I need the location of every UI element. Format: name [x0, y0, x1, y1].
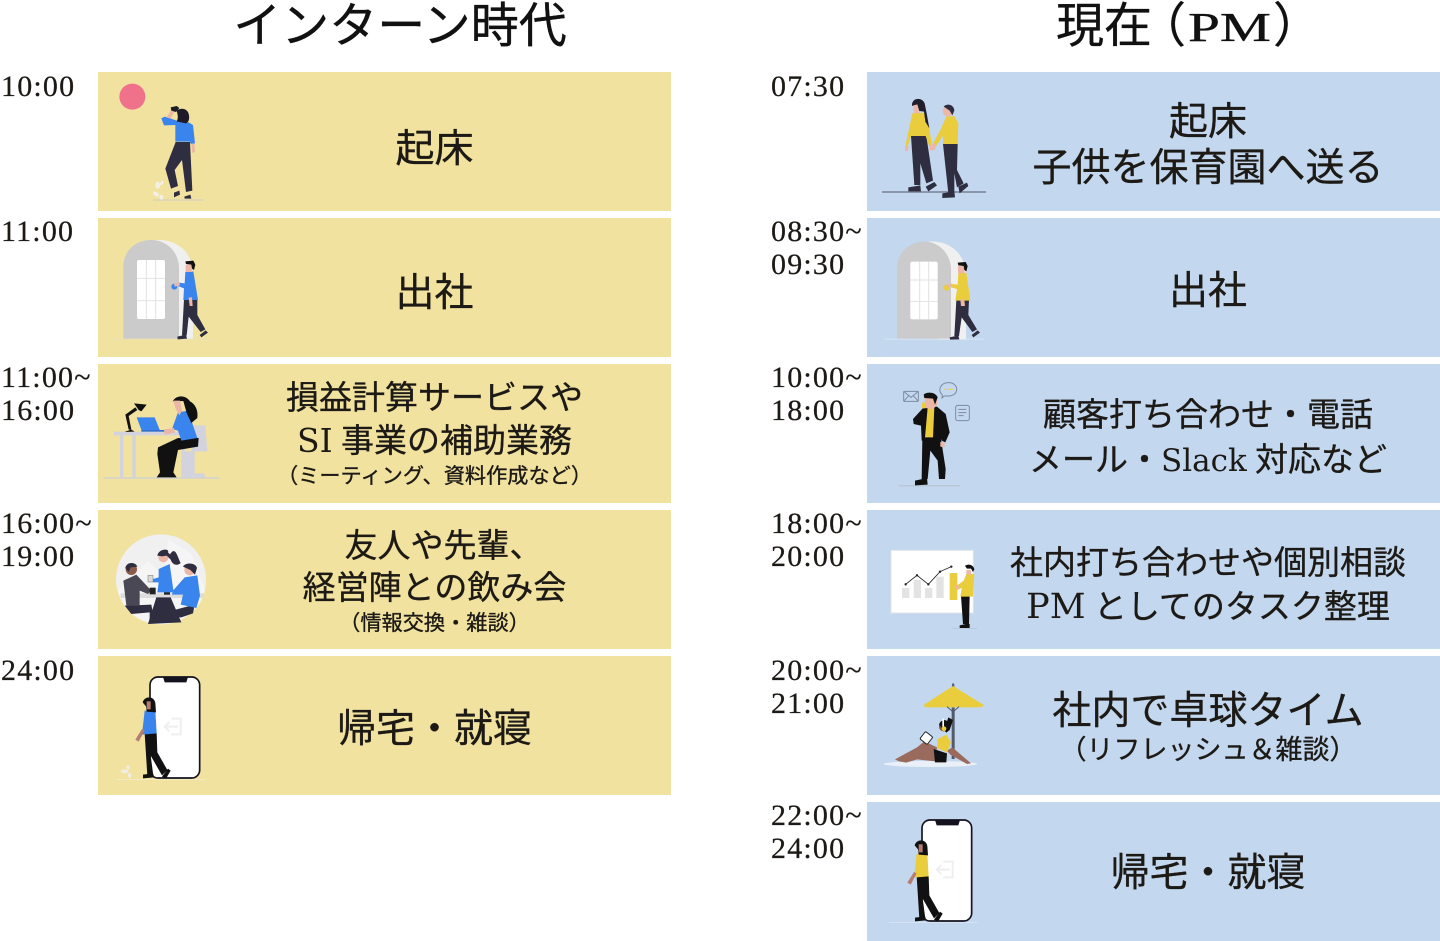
panel: 起床 (intern) — [98, 72, 671, 211]
time: 16:00~19:00: 16:00~ — [1, 507, 93, 540]
time: 22:00~24:00 — [771, 799, 863, 865]
text: 友人や先輩、: 経営陣との飲み会 — [303, 571, 566, 607]
text: 起床 子供を保育園へ送る: 子供を保育園へ送る — [1032, 147, 1384, 190]
time: 08:30~09:30 — [771, 215, 863, 281]
time: 10:00~18:00: 10:00~ — [771, 361, 863, 394]
time: 20:00~21:00 — [771, 654, 863, 720]
time: 10:00~18:00 — [771, 361, 863, 427]
text: 起床: 起床 — [395, 128, 474, 171]
icon: man at door — [884, 242, 984, 340]
panel: 損益計算サービスや SI 事業の補助業務 — [98, 364, 671, 503]
time: 11:00~16:00 — [1, 361, 92, 427]
time: 10:00~18:00: 18:00 — [771, 394, 845, 427]
time: 18:00~20:00 — [771, 507, 863, 573]
text: 損益計算サービスや: （ミーティング、資料作成など） — [277, 464, 592, 488]
panel: 友人や先輩 — [98, 510, 671, 649]
time: 18:00~20:00: 18:00~ — [771, 507, 863, 540]
panel: 帰宅・就寝 (PM) — [867, 802, 1440, 941]
time: 20:00~21:00: 20:00~ — [771, 654, 863, 687]
time: 11:00: 11:00 — [1, 215, 74, 248]
text: 社内打ち合わせや個別相談: PM としてのタスク整理 — [1026, 587, 1390, 627]
text: 帰宅・就寝: 帰宅・就寝 — [1110, 852, 1306, 895]
time: 20:00~21:00: 21:00 — [771, 687, 845, 720]
title: 現在（PM） — [1056, 0, 1321, 53]
icon: woman and phone — [889, 819, 978, 922]
text: 社内で卓球タイム — [1052, 690, 1364, 765]
text: 社内打ち合わせや個別相談: 社内打ち合わせや個別相談 — [1010, 546, 1406, 582]
panel: 起床 子供を保育園へ送る — [867, 72, 1440, 211]
time: 18:00~20:00: 20:00 — [771, 540, 845, 573]
panel: 出社 (PM) — [867, 218, 1440, 357]
icon: woman and sun — [119, 84, 203, 201]
text: 帰宅・就寝: 帰宅・就寝 — [337, 708, 532, 751]
icon: man at door — [112, 240, 212, 340]
icon: man at chart board — [890, 550, 977, 629]
title: 現在（PM）: PM — [1188, 4, 1271, 50]
text: 社内で卓球タイム: （リフレッシュ＆雑談） — [1060, 735, 1356, 765]
time: 11:00~16:00: 16:00 — [1, 394, 75, 427]
time: 07:30: 07:30 — [771, 70, 845, 103]
text: 顧客打ち合わせ・電話: 顧客打ち合わせ・電話 — [1043, 398, 1373, 434]
title: インターン時代: インターン時代 — [233, 0, 567, 53]
time: 22:00~24:00: 22:00~ — [771, 799, 863, 832]
time: 10:00: 10:00 — [1, 70, 75, 103]
text: 損益計算サービスや — [277, 380, 592, 488]
panel: 出社 (intern) — [98, 218, 671, 357]
time: 08:30~09:30: 08:30~ — [771, 215, 863, 248]
text: 損益計算サービスや: SI 事業の補助業務 — [297, 421, 572, 460]
icon: couple holding hands — [882, 98, 986, 198]
text: 友人や先輩、: 友人や先輩、 — [344, 529, 542, 565]
icon: man on phone — [898, 382, 970, 486]
time: 11:00~16:00: 11:00~ — [1, 361, 92, 394]
panel: 社内で卓球タイム — [867, 656, 1440, 795]
text: 出社: 出社 — [1169, 270, 1247, 313]
time: 16:00~19:00 — [1, 507, 93, 573]
panel: 顧客打ち合わせ・電話 — [867, 364, 1440, 503]
text: ） — [1273, 0, 1321, 53]
panel: 帰宅・就寝 (intern) — [98, 656, 671, 795]
time: 16:00~19:00: 19:00 — [1, 540, 75, 573]
time: 08:30~09:30: 09:30 — [771, 248, 845, 281]
text: 損益計算サービスや: 損益計算サービスや — [286, 381, 583, 417]
icon: people around a table — [116, 534, 206, 624]
panel: 社内打ち合わせや個別相談 — [867, 510, 1440, 649]
text: 社内打ち合わせや個別相談 — [1010, 546, 1406, 627]
text: 友人や先輩、: （情報交換・雑談） — [339, 611, 530, 635]
time: 24:00: 24:00 — [1, 654, 75, 687]
text: 起床 子供を保育園へ送る: 起床 — [1169, 101, 1247, 144]
text: 社内で卓球タイム: 社内で卓球タイム — [1052, 690, 1364, 733]
time: 22:00~24:00: 24:00 — [771, 832, 845, 865]
text: 起床 子供を保育園へ送る — [1032, 101, 1384, 190]
text: 友人や先輩、 — [303, 528, 566, 635]
title: 現在（PM）: 現在 — [1056, 0, 1152, 53]
text: 顧客打ち合わせ・電話 — [1029, 398, 1387, 479]
icon: woman and phone — [117, 676, 206, 780]
title: 現在（PM）: （ — [1138, 0, 1186, 53]
text: 顧客打ち合わせ・電話: メール・Slack 対応など — [1029, 443, 1387, 479]
icon: woman under parasol — [884, 683, 984, 767]
icon: woman at desk — [103, 396, 220, 479]
text: 出社: 出社 — [395, 272, 474, 315]
